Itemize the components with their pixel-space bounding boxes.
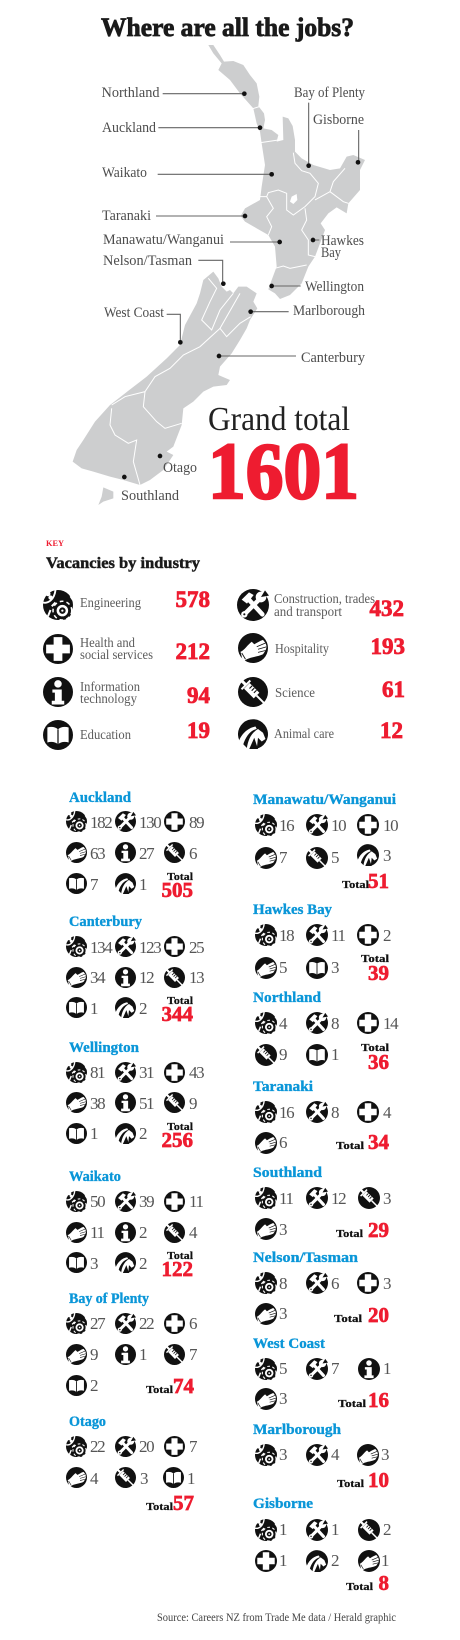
key: education [43,718,210,750]
total: Total [167,1121,193,1133]
vacancy icons: 123 [139,938,161,957]
vacancy icons [255,1272,391,1325]
vacancy icons: 50 [90,1192,105,1211]
vacancy icons: 1 [279,1551,287,1570]
total [336,1218,389,1242]
key: hospitality: 193 [370,634,405,659]
vacancy icons: 5 [331,848,339,867]
heading: Southland [253,1165,323,1181]
vacancy icons: 7 [189,1345,198,1364]
total: 505 [162,878,193,902]
vacancy icons: 1 [139,875,147,894]
total: 51 [368,869,389,893]
key: information technology: 94 [187,683,210,708]
panel: Waikato [66,1169,203,1281]
total: 36 [368,1050,389,1074]
total: Total [338,1398,366,1410]
key heading: Vacancies by industry [46,555,200,572]
map labels: Auckland [102,120,157,136]
vacancy icons: 8 [331,1103,339,1122]
heading: Northland [253,990,322,1006]
vacancy icons: 3 [279,1389,287,1408]
total: 29 [368,1218,389,1242]
total: Total [361,1042,389,1054]
map of New Zealand [73,45,365,505]
map: location dots [122,91,360,479]
heading: Gisborne [253,1496,313,1512]
total: Total [337,1478,364,1490]
panel: Canterbury [66,914,204,1026]
map: North Island [208,45,365,299]
key: science: Science [275,685,315,700]
key: hospitality: Hospitality [275,641,329,656]
map: region borders [110,107,348,485]
panel: Wellington [66,1040,204,1152]
map labels [102,85,366,504]
key: science: 61 [382,677,405,702]
vacancy icons: 1 [279,1520,287,1539]
vacancy icons: 3 [279,1445,287,1464]
vacancy icons: 4 [279,1014,288,1033]
map labels: Bay [321,245,342,261]
vacancy icons: 22 [90,1437,105,1456]
vacancy icons: 1 [331,1520,339,1539]
vacancy icons: 25 [189,938,204,957]
total: 74 [173,1374,194,1398]
vacancy icons [255,1518,391,1572]
vacancy icons: 182 [90,813,112,832]
map labels: Northland [102,85,160,101]
vacancy icons: 12 [331,1189,346,1208]
heading: West Coast [253,1336,325,1352]
vacancy icons: 1 [187,1469,195,1488]
vacancy icons: 6 [279,1133,287,1152]
panel: Northland [253,990,399,1074]
vacancy icons: 2 [331,1551,339,1570]
map labels: Hawkes [321,233,364,249]
heading: Bay of Plenty [69,1291,149,1307]
vacancy icons [66,1191,203,1273]
heading: Canterbury [69,914,142,930]
vacancy icons: 63 [90,844,105,863]
vacancy icons [255,924,391,979]
vacancy icons: 3 [381,1445,389,1464]
vacancy icons [254,1012,399,1066]
heading: Auckland [69,790,132,806]
vacancy icons: 16 [279,816,294,835]
vacancy icons: 3 [279,1304,287,1323]
vacancy icons: 5 [279,958,287,977]
vacancy icons: 13 [189,968,204,987]
vacancy icons: 2 [139,999,147,1018]
vacancy icons: 10 [331,816,346,835]
key: information technology: Information [80,679,140,694]
vacancy icons: 1 [331,1045,339,1064]
vacancy icons: 6 [331,1274,339,1293]
vacancy icons [255,1444,389,1466]
vacancy icons: 89 [189,813,204,832]
key: education: Education [80,727,131,742]
vacancy icons [66,936,204,1018]
panel: Manawatu/Wanganui [253,792,398,893]
vacancy icons: 11 [279,1189,293,1208]
title: Where are all the jobs? [101,13,354,42]
vacancy icons: 20 [139,1437,154,1456]
total: 20 [368,1303,389,1327]
vacancy icons: 1 [90,999,98,1018]
vacancy icons: 10 [383,816,398,835]
vacancy icons: 31 [139,1063,154,1082]
panel: Taranaki [253,1079,392,1154]
vacancy icons [255,1358,391,1410]
vacancy icons: 2 [139,1254,147,1273]
map labels: Gisborne [313,112,364,128]
map labels: Canterbury [301,350,366,366]
total [334,1303,389,1327]
vacancy icons: 130 [139,813,161,832]
panel: Gisborne [253,1496,391,1595]
vacancy icons: 1 [383,1359,391,1378]
total: Total [346,1581,373,1593]
vacancy icons: 81 [90,1063,105,1082]
vacancy icons: 18 [279,926,294,945]
total: 122 [162,1257,193,1281]
total: 256 [162,1128,193,1152]
total: Total [167,1250,193,1262]
vacancy icons: 34 [90,968,106,987]
panel: Hawkes Bay [253,902,391,985]
map labels: Manawatu/Wanganui [103,232,224,248]
total: Total [146,1384,173,1396]
map labels: Bay of Plenty [294,85,366,101]
vacancy icons: 3 [90,1254,98,1273]
key: animal care: 12 [380,718,403,743]
map: leader lines [156,94,359,356]
total: 34 [368,1130,390,1154]
vacancy icons: 2 [383,1520,391,1539]
panel: Bay of Plenty [66,1291,198,1398]
vacancy icons: 3 [331,958,339,977]
vacancy icons: 43 [189,1063,204,1082]
heading: Taranaki [253,1079,313,1095]
key: animal care: Animal care [274,726,334,741]
key label: KEY [46,538,64,548]
total: 16 [368,1388,389,1412]
key: health: Health and [80,635,135,650]
total [146,1491,194,1515]
vacancy icons [66,1062,204,1144]
panel: key [43,587,405,750]
vacancy icons: 2 [139,1124,147,1143]
map labels: Wellington [305,279,365,295]
vacancy icons: 1 [381,1551,389,1570]
vacancy icons: 16 [279,1103,294,1122]
key: construction: 432 [370,596,404,621]
key: information technology: technology [80,691,137,706]
vacancy icons: 1 [90,1124,98,1143]
total: Total [361,953,389,965]
vacancy icons: 2 [383,926,391,945]
vacancy icons: 11 [331,926,345,945]
total [346,1571,389,1595]
total: Total [146,1501,173,1513]
key: health: 212 [176,639,210,664]
vacancy icons: 7 [90,875,99,894]
map labels: Taranaki [102,208,151,224]
vacancy icons: 7 [189,1437,198,1456]
vacancy icons: 22 [139,1314,154,1333]
source line: Source: Careers NZ from Trade Me data / Herald graphic [157,1612,396,1624]
key: animal care [238,718,403,749]
vacancy icons [255,814,398,869]
vacancy icons: 7 [279,848,288,867]
map: South Island [73,272,257,485]
vacancy icons: 9 [90,1345,98,1364]
vacancy icons [255,1101,392,1154]
total: Total [336,1140,364,1152]
vacancy icons: 4 [331,1445,340,1464]
total: Total [342,879,369,891]
grand total number: 1601 [208,426,359,516]
total: Total [336,1228,363,1240]
heading: Waikato [69,1169,121,1185]
total [336,1130,390,1154]
key: science [237,676,405,707]
total [337,1468,389,1492]
key: engineering [43,587,210,620]
map labels: Southland [121,488,180,504]
key: construction: and transport [274,604,342,619]
total [342,869,389,893]
vacancy icons: 9 [279,1045,287,1064]
vacancy icons: 2 [139,1223,147,1242]
heading: Otago [69,1414,106,1430]
vacancy icons: 3 [383,846,391,865]
vacancy icons: 134 [90,938,113,957]
vacancy icons: 5 [279,1359,287,1378]
heading: Wellington [69,1040,140,1056]
vacancy icons: 11 [90,1223,104,1242]
map labels: Otago [163,460,197,476]
key: construction: Construction, trades [274,591,375,606]
vacancy icons: 3 [383,1274,391,1293]
panel: Auckland [66,790,204,902]
total: Total [167,871,193,883]
vacancy icons: 7 [331,1359,340,1378]
grand total label: Grand total [208,401,350,438]
total [361,953,389,985]
panel: West Coast [253,1336,391,1412]
vacancy icons: 51 [139,1094,154,1113]
total [361,1042,389,1074]
map labels: Marlborough [293,303,366,319]
vacancy icons: 8 [331,1014,339,1033]
key: information technology [43,677,210,708]
vacancy icons: 1 [139,1345,147,1364]
total: 344 [162,1002,194,1026]
vacancy icons: 4 [90,1469,99,1488]
map labels: West Coast [104,305,164,321]
total [338,1388,389,1412]
vacancy icons: 12 [139,968,154,987]
vacancy icons: 4 [383,1103,392,1122]
map: Lake Taupo [290,194,297,204]
vacancy icons: 3 [140,1469,148,1488]
panel: Nelson/Tasman [253,1250,391,1327]
vacancy icons: 9 [189,1094,197,1113]
panel: Otago [66,1414,198,1515]
vacancy icons: 4 [189,1223,198,1242]
total: 57 [173,1491,194,1515]
vacancy icons: 3 [383,1189,391,1208]
vacancy icons: 11 [189,1192,203,1211]
map: Stewart Island [98,487,113,505]
vacancy icons: 39 [139,1192,154,1211]
heading: Nelson/Tasman [253,1250,359,1266]
total: 8 [378,1571,389,1595]
vacancy icons [255,1186,391,1240]
vacancy icons: 3 [279,1220,287,1239]
vacancy icons: 27 [90,1314,106,1333]
key: engineering: 578 [176,587,210,612]
vacancy icons: 8 [279,1274,287,1293]
key: engineering: Engineering [80,595,141,610]
vacancy icons: 2 [90,1376,98,1395]
map labels: Waikato [102,165,147,181]
heading: Marlborough [253,1422,342,1438]
key: education: 19 [187,718,210,743]
total: 39 [368,961,389,985]
heading: Hawkes Bay [253,902,332,918]
vacancy icons [66,1436,198,1488]
total: Total [334,1313,362,1325]
key: construction [237,589,404,621]
key: health: social services [80,647,153,662]
key: health [43,634,210,664]
map labels: Nelson/Tasman [103,253,193,269]
heading: Manawatu/Wanganui [253,792,396,808]
key: hospitality [238,633,405,663]
vacancy icons: 27 [139,844,155,863]
panel: Southland [253,1165,391,1242]
vacancy icons: 6 [189,1314,197,1333]
total: Total [167,995,193,1007]
vacancy icons [66,811,204,894]
vacancy icons [66,1313,198,1396]
vacancy icons: 38 [90,1094,105,1113]
vacancy icons: 14 [383,1014,399,1033]
panel: Marlborough [253,1422,389,1492]
vacancy icons: 6 [189,844,197,863]
total: 10 [368,1468,389,1492]
total [146,1374,194,1398]
